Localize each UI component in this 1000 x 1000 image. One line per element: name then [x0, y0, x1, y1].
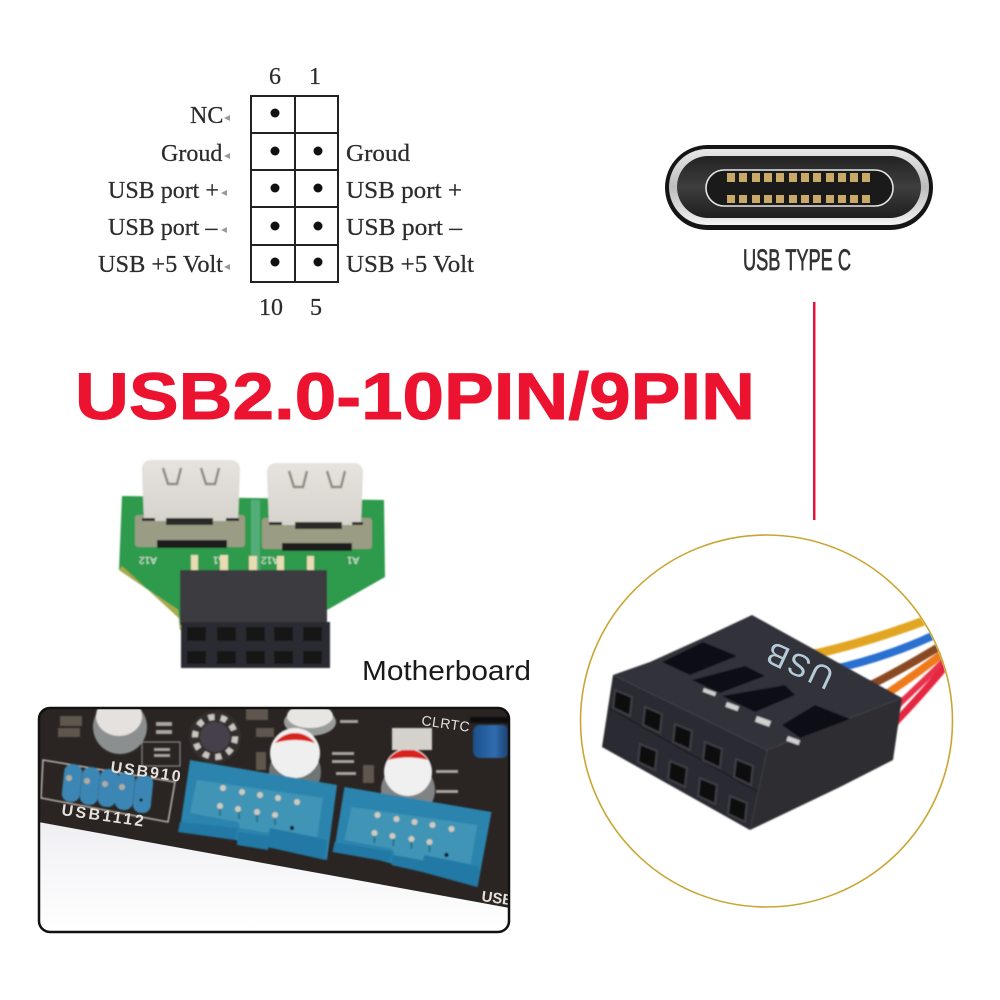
board silkscreen text: USB910 — [109, 759, 184, 786]
pin grid — [251, 96, 338, 282]
left pin labels: Groud — [161, 141, 222, 167]
adapter board photo — [119, 460, 385, 668]
main heading: USB2.0-10PIN/9PIN — [75, 359, 755, 433]
port shell — [665, 145, 933, 230]
red connector line — [813, 302, 816, 520]
USB moulded text: USB — [759, 634, 839, 697]
coloured wires — [812, 616, 946, 726]
pin numbers: 6 — [269, 64, 281, 90]
left label arrows — [221, 115, 230, 270]
right pin labels: USB port + — [346, 178, 462, 204]
left pin labels: USB +5 Volt — [98, 252, 223, 278]
capacitors — [92, 710, 148, 755]
pin numbers: 1 — [309, 64, 321, 90]
right pin labels: USB port – — [346, 215, 463, 241]
dark circuit board — [38, 707, 510, 908]
board silkscreen text — [60, 712, 514, 909]
exposed metal — [703, 688, 800, 745]
left pin labels — [98, 103, 223, 278]
gold circle callout — [580, 535, 952, 907]
pin numbers: 5 — [310, 295, 322, 321]
silkscreen labels: A1 — [346, 554, 359, 565]
silkscreen labels: A12 — [139, 554, 157, 565]
right pin labels — [346, 141, 474, 278]
USB TYPE C label: USB TYPE C — [743, 244, 851, 277]
photo frame — [39, 708, 509, 932]
silkscreen labels: A12 — [261, 554, 279, 565]
blue cap — [473, 725, 509, 758]
board silkscreen text: USB — [480, 888, 514, 909]
first blue USB header — [178, 760, 337, 860]
header pins — [191, 555, 314, 571]
green PCB — [119, 496, 385, 632]
9-pin plug with wires — [602, 615, 955, 830]
pin numbers — [259, 64, 322, 321]
pin numbers: 10 — [259, 295, 283, 321]
USB type C port icon — [665, 145, 933, 277]
second blue USB header — [332, 787, 492, 887]
right pin labels: Groud — [346, 141, 410, 167]
gold contacts — [727, 173, 870, 203]
left USB-C socket — [135, 460, 245, 548]
right USB-C socket — [262, 463, 372, 551]
motherboard photo — [38, 696, 514, 933]
silkscreen labels: A1 — [212, 554, 225, 565]
right pin labels: USB +5 Volt — [346, 252, 474, 278]
mounting hole — [189, 711, 241, 763]
board silkscreen text: CLRTC — [421, 712, 471, 735]
Motherboard label: Motherboard — [362, 655, 531, 686]
pin dots — [270, 108, 322, 266]
board silkscreen text: USB1112 — [60, 802, 147, 831]
photo contents — [40, 709, 508, 908]
left pin labels: USB port + — [108, 178, 219, 204]
silkscreen labels — [139, 554, 359, 565]
black socket — [180, 570, 327, 625]
plug holes — [613, 690, 753, 822]
left pin labels: NC — [190, 103, 223, 129]
socket holes — [187, 627, 322, 664]
pinout diagram — [98, 64, 474, 321]
chips — [58, 708, 374, 783]
small blue header — [41, 760, 175, 822]
top slots — [662, 642, 850, 738]
left pin labels: USB port – — [108, 215, 218, 241]
plug body — [602, 615, 902, 830]
